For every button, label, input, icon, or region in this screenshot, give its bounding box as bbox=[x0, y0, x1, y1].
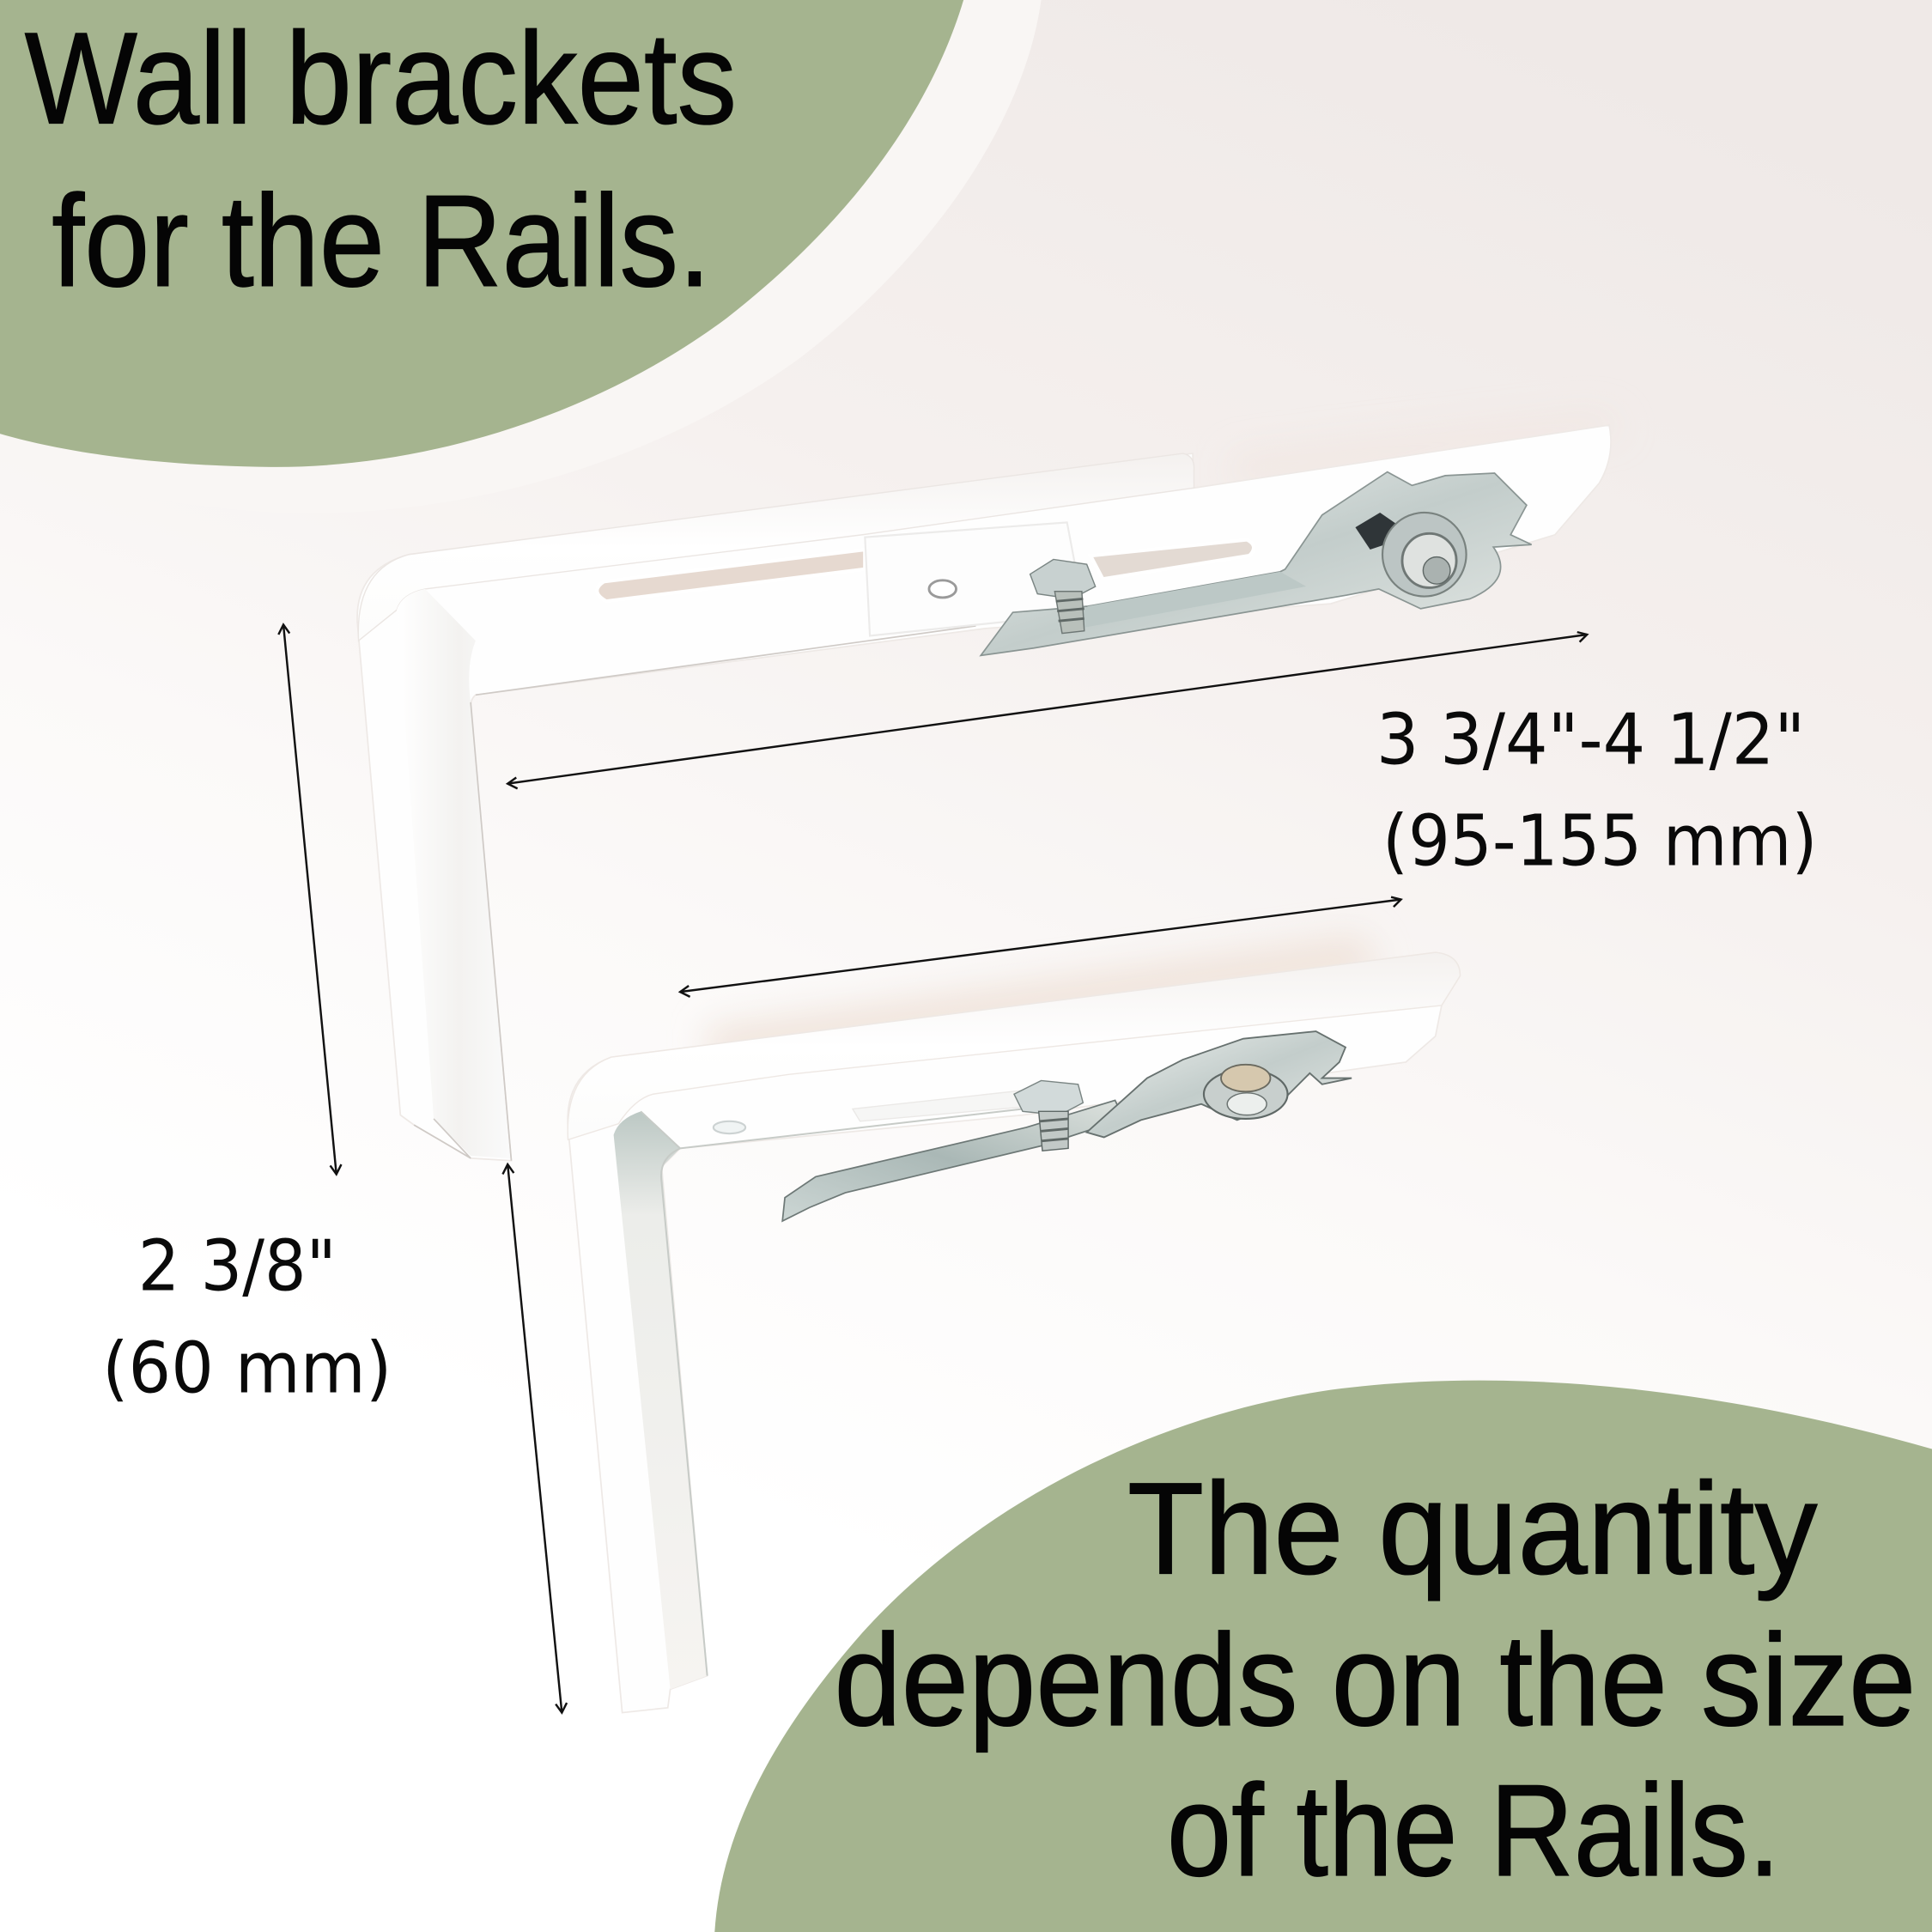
dimension label: height: (60 mm) bbox=[102, 1327, 392, 1409]
large bracket inner arm shade bbox=[397, 589, 510, 1158]
large bracket washer and screw bbox=[1355, 513, 1467, 597]
small bracket edge lines bbox=[641, 1109, 1023, 1676]
large bracket edge lines bbox=[414, 626, 975, 1161]
green blob: top left bbox=[0, 0, 963, 467]
dimension label: width bbox=[1376, 700, 1818, 882]
green blob: bottom right bbox=[714, 1381, 1932, 1932]
small bracket slot bbox=[853, 1091, 1029, 1121]
arrow: width of large bracket bbox=[507, 632, 1587, 788]
large bracket hardware lever bbox=[1060, 572, 1306, 632]
large bracket slot right bbox=[1091, 540, 1254, 579]
small bracket rivet hole bbox=[714, 1121, 745, 1133]
dimension label: width: (95-155 mm) bbox=[1382, 800, 1818, 882]
large bracket hex bolt bbox=[1030, 559, 1096, 634]
large bracket slot left bbox=[597, 550, 865, 601]
large bracket hardware arm bbox=[981, 472, 1532, 655]
large bracket top rod bbox=[358, 453, 1194, 641]
heading: wall brackets: for the Rails. bbox=[52, 168, 711, 314]
small bracket hardware lever bbox=[782, 1100, 1124, 1221]
arrow: height of large bracket bbox=[278, 625, 341, 1175]
small bracket body bbox=[568, 952, 1460, 1713]
cast shadows of the brackets bbox=[708, 413, 1626, 1066]
heading: quantity note: of the Rails. bbox=[1167, 1758, 1781, 1904]
dimension label: width: 3 3/4"-4 1/2" bbox=[1376, 700, 1805, 781]
heading: quantity note bbox=[834, 1455, 1916, 1904]
arrow: width of small bracket bbox=[680, 897, 1401, 997]
large bracket bbox=[357, 425, 1611, 1161]
arrow: height of small bracket bbox=[502, 1164, 567, 1713]
pale halo ring around top heading blob bbox=[0, 0, 1042, 513]
large bracket rivet hole bbox=[929, 580, 957, 598]
small bracket hex bolt bbox=[1014, 1080, 1083, 1151]
small bracket inner arm shade bbox=[614, 1111, 708, 1689]
small bracket hardware cam bbox=[1087, 1031, 1352, 1137]
heading: wall brackets: Wall brackets bbox=[25, 5, 737, 151]
small bracket top rod bbox=[568, 952, 1460, 1139]
heading: quantity note: The quantity bbox=[1127, 1455, 1818, 1601]
dimension label: height bbox=[102, 1225, 392, 1409]
small bracket bbox=[568, 952, 1460, 1713]
heading: wall brackets bbox=[25, 5, 737, 314]
small bracket washer and screw bbox=[1204, 1065, 1288, 1119]
dimension label: height: 2 3/8" bbox=[138, 1225, 337, 1307]
large bracket body bbox=[357, 425, 1611, 1161]
large bracket sliding plate bbox=[865, 522, 1084, 635]
